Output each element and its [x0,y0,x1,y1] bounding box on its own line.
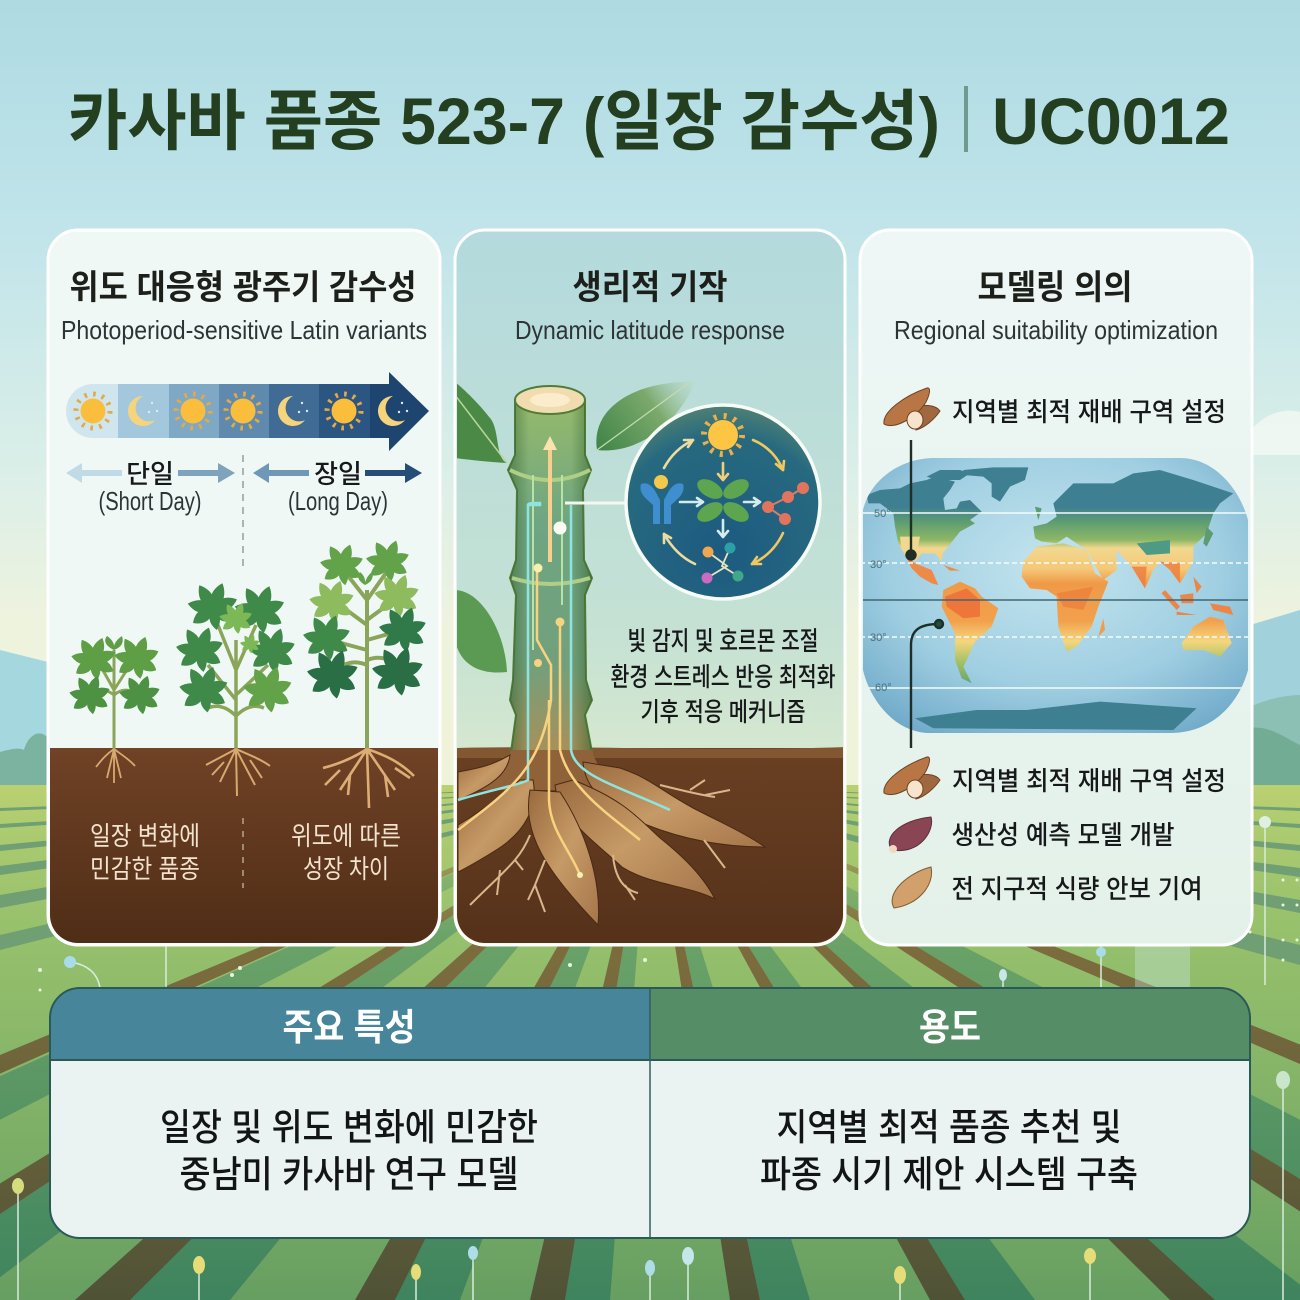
long day label [253,459,422,516]
panel 2 heading: 생리적 기작 [572,269,728,307]
soil text: growth difference: 위도에 따른 [291,821,401,851]
panel 1 heading: 위도 대응형 광주기 감수성 [70,269,416,307]
list item 1: 지역별 최적 재배 구역 설정 [952,766,1226,796]
soil [50,748,438,943]
leaves on stem [455,382,695,673]
panel 2 subheading: Dynamic latitude response [515,315,785,345]
long day label: 장일 [314,459,362,489]
icon: cassava [884,388,940,430]
mechanism circle diagram [626,405,820,599]
list item 3 [892,867,1202,908]
plant: short day [68,635,161,783]
short day label: (Short Day) [98,486,202,516]
summary table [50,988,1250,1238]
list item 1 [884,757,1226,799]
list item top: 지역별 최적 재배 구역 설정 [952,397,1226,427]
stem [508,400,592,752]
short day label: 단일 [126,459,174,489]
world map: 30° [870,632,887,644]
stem energy lines [458,436,670,875]
day length timeline arrow [66,372,429,451]
mechanism text: 환경 스트레스 반응 최적화 [610,662,836,692]
world map: 50° [874,508,891,520]
signal compounds [707,548,738,578]
short day label [66,459,235,516]
usage text [760,1107,1138,1195]
mechanism text [610,626,836,727]
mechanism text: 빛 감지 및 호르몬 조절 [628,626,818,656]
soil text: sensitive variety [90,821,200,884]
world map [860,455,1252,735]
long day label: (Long Day) [288,486,388,516]
soil and tubers [455,382,845,948]
world map: 60° [875,682,892,694]
plant: intermediate [175,581,297,796]
latitude lines [860,513,1252,688]
panel: photoperiod sensitivity [48,230,440,945]
mechanism text: 기후 적응 메커니즘 [640,697,806,727]
panel 1 subheading: Photoperiod-sensitive Latin variants [61,315,427,345]
sun [704,416,742,454]
list item 3: 전 지구적 식량 안보 기여 [952,874,1202,904]
list item 2 [889,817,1175,853]
world map: 30° [870,559,887,571]
title: UC0012 [992,84,1230,158]
panel 3 subheading: Regional suitability optimization [894,315,1218,345]
tubers [458,755,765,925]
furrow rows [0,785,1300,1300]
panel 3 heading: 모델링 의의 [978,269,1132,307]
header: usage [650,988,1250,1060]
rootlets [470,780,730,912]
soil text: growth difference [291,821,401,884]
header: key traits [50,988,650,1060]
list item 2: 생산성 예측 모델 개발 [952,820,1175,850]
key traits text: 중남미 카사바 연구 모델 [180,1154,518,1195]
stem trunk flare [481,750,598,790]
light receptor [640,475,684,524]
soil text: sensitive variety: 일장 변화에 [90,821,200,851]
header: key traits: 주요 특성 [282,1007,416,1048]
panel: modeling significance [860,230,1252,945]
map pointers [906,440,943,748]
molecules [768,488,803,519]
plant: long day [302,539,428,808]
leaves [694,475,752,526]
cycle arrows [664,440,784,564]
key traits text [160,1107,538,1195]
usage text: 파종 시기 제안 시스템 구축 [760,1154,1138,1195]
soil text: sensitive variety: 민감한 품종 [90,854,200,884]
key traits text: 일장 및 위도 변화에 민감한 [160,1107,538,1148]
panel: physiological mechanism [455,230,845,948]
sensor poles decoration [12,816,1298,1300]
usage text: 지역별 최적 품종 추천 및 [776,1107,1122,1148]
soil text: growth difference: 성장 차이 [303,854,389,884]
header: usage: 용도 [919,1007,981,1048]
title: 카사바 품종 523-7 (일장 감수성) [68,84,940,158]
